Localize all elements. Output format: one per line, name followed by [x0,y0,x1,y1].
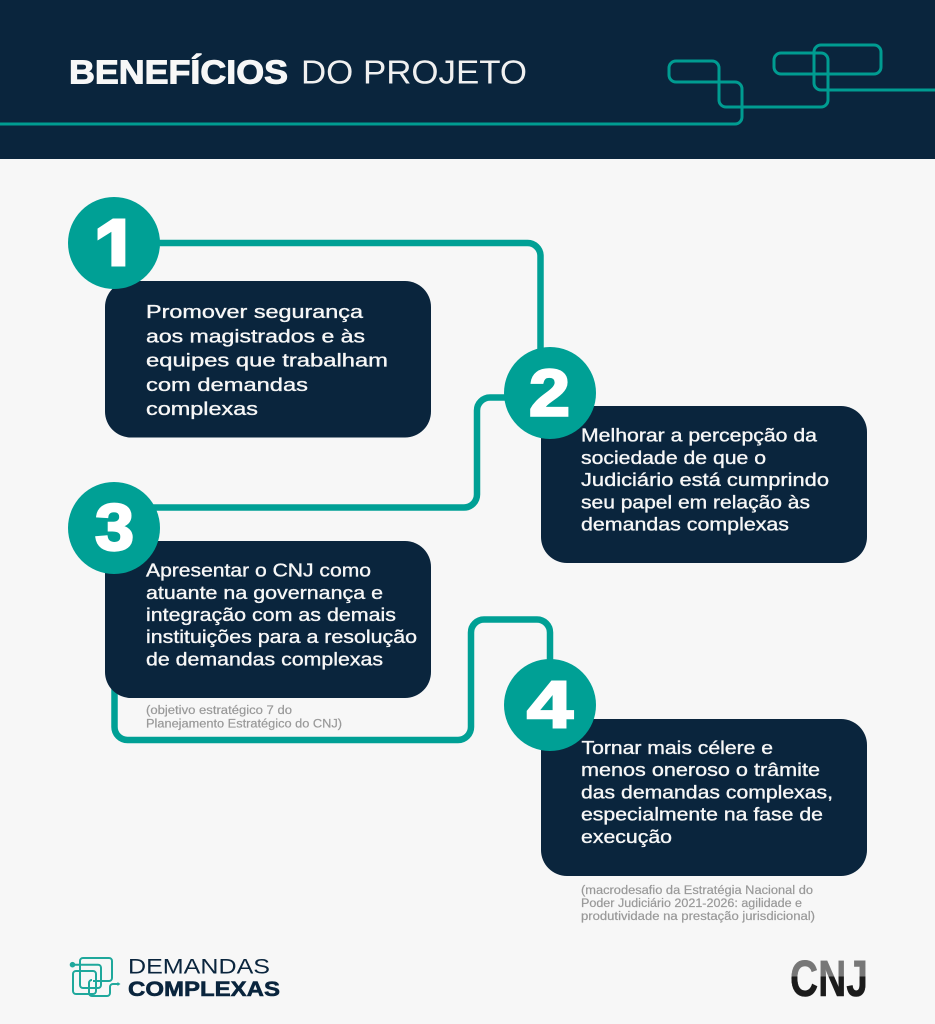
logo: Demandas Complexas: COMPLEXAS [128,977,280,1001]
logo: Demandas Complexas [71,954,280,1001]
panel: benefit 1 [105,281,431,438]
text: benefit 1 [146,301,388,419]
note: benefit 4 [581,885,815,923]
text: benefit 1: complexas [146,398,258,419]
text: benefit 3: de demandas complexas [146,648,383,669]
note: benefit 3: Planejamento Estratégico do CNJ) [146,718,342,730]
text: benefit 2 [581,425,829,534]
number badge 4: 4 [527,667,573,741]
title [69,54,527,90]
text: benefit 2: Melhorar a percepção da [581,425,818,446]
logo: CNJ: CNJ [790,950,868,1007]
text: benefit 3: instituições para a resolução [146,626,417,647]
text: benefit 4: menos oneroso o trâmite [581,759,820,780]
panel: benefit 2 [541,406,867,563]
header connected line motif [0,45,935,124]
text: benefit 1: aos magistrados e às [146,326,365,346]
number badge 2 [504,347,596,439]
number badge 1 [68,197,160,296]
connector: step 1 to step 2 [155,243,540,360]
logo: Demandas Complexas: DEMANDAS [128,954,270,978]
number badge 3 [68,482,160,574]
text: benefit 2: sociedade de que o [581,447,766,468]
text: benefit 4: execução [581,826,672,847]
connector: step 2 to step 3 [145,398,515,508]
header band [0,0,935,159]
note: benefit 4: (macrodesafio da Estratégia Nacional do [581,885,813,897]
text: benefit 4: especialmente na fase de [581,804,823,825]
text: benefit 3: Apresentar o CNJ como [146,560,371,581]
text: benefit 3: atuante na governança e [146,582,383,603]
number badge 2: 2 [529,356,570,430]
note: benefit 3 [146,705,342,730]
text: benefit 4: Tornar mais célere e [582,737,773,758]
number badge 3: 3 [95,490,134,564]
number badge 1: 1 [93,202,140,296]
text: benefit 4: das demandas complexas, [581,781,833,802]
number badge 4 [504,659,596,751]
text: benefit 1: com demandas [146,374,308,395]
panel: benefit 3 [105,541,431,698]
text: benefit 1: equipes que trabalham [146,350,388,371]
text: benefit 3 [146,560,417,669]
text: benefit 2: seu papel em relação às [581,491,810,512]
text: benefit 1: Promover segurança [146,301,364,322]
icon: overlapping line squares [71,958,120,996]
note: benefit 4: Poder Judiciário 2021-2026: agilidade e [581,898,802,910]
text: benefit 2: demandas complexas [581,514,789,534]
text: benefit 2: Judiciário está cumprindo [581,469,829,490]
panel: benefit 4 [541,719,867,876]
note: benefit 3: (objetivo estratégico 7 do [146,705,292,717]
note: benefit 4: produtividade na prestação jurisdicional) [581,911,815,923]
text: benefit 3: integração com as demais [146,604,396,625]
text: benefit 4 [581,737,833,847]
title: BENEFÍCIOS [69,54,288,90]
title: DO PROJETO [301,54,527,90]
connector: step 3 to step 4 [114,620,550,740]
